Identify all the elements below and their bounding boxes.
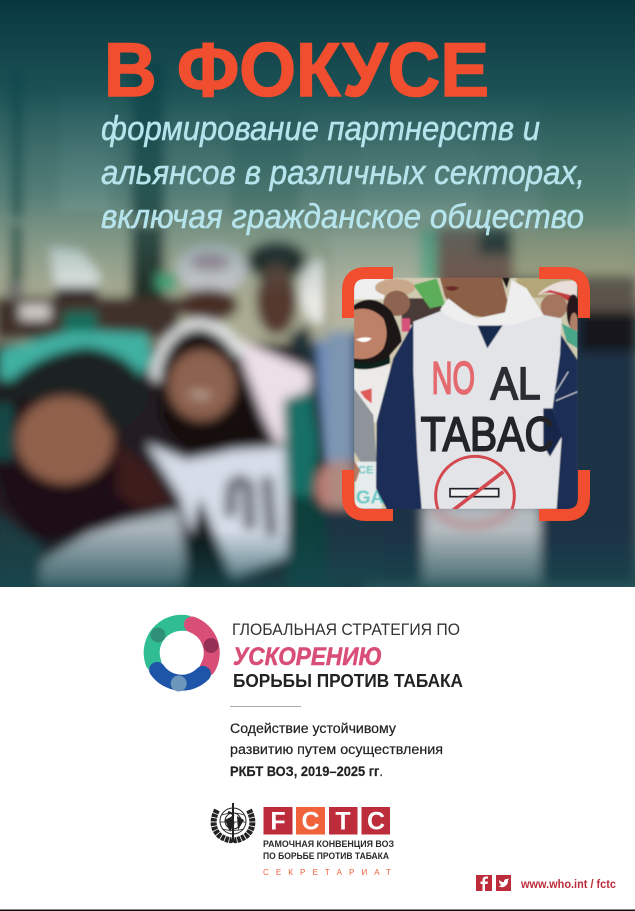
FCTC logo [263,807,394,877]
woman 1 cap [6,341,146,399]
icon: facebook [476,875,492,891]
strategy description: Содействие устойчивому [230,721,396,736]
strategy name: ГЛОБАЛЬНАЯ СТРАТЕГИЯ ПО [232,620,460,639]
green jacket [283,390,318,503]
woman 1 hair [0,401,136,544]
vest [413,310,562,509]
FCTC logo: C [301,808,320,836]
vest lettering: NO [432,352,475,403]
strategy description: развитию путем осуществления [230,742,443,757]
woman 2 hood [150,318,247,387]
navy sleeves [376,323,427,509]
strategy name: УСКОРЕНИЮ [233,643,382,671]
strategy name: БОРЬБЫ ПРОТИВ ТАБАКА [233,671,463,691]
subtitle: альянсов в различных секторах, [101,154,585,192]
subtitle: формирование партнерств и [101,110,540,148]
strategy ring logo [150,623,218,692]
upper blurred scenery [0,96,635,301]
right side blurred boy, in zoomed coordinates [327,228,635,585]
FCTC logo: C [367,808,385,836]
orange focus brackets [348,273,584,515]
icon: twitter [496,875,511,891]
focused photo: protester wearing NO AL TABACO vest: AL [491,358,541,409]
woman 2 shirt [147,443,287,587]
no smoking sign [434,454,516,509]
strategy name [232,620,463,691]
hood [440,280,543,326]
icon: WHO emblem [214,803,252,842]
website: www.who.int / fctc [520,877,616,891]
man on right [537,281,577,300]
woman on left [354,300,402,370]
head and neck [440,278,508,318]
focused photo: protester wearing NO AL TABACO vest: GAS [356,486,396,507]
focused photo: protester wearing NO AL TABACO vest: CE [358,464,374,476]
woman 2 hair [160,328,267,456]
strategy description [230,721,443,779]
FCTC logo: СЕКРЕТАРИАТ [263,868,391,877]
FCTC logo: ПО БОРЬБЕ ПРОТИВ ТАБАКА [263,851,389,861]
focused photo: protester wearing NO AL TABACO vest: TABAC [421,408,554,462]
FCTC logo: РАМОЧНАЯ КОНВЕНЦИЯ ВОЗ [263,839,394,849]
subtitle [101,110,585,236]
FCTC logo: T [335,808,351,836]
woman 1 shirt [33,510,187,587]
subtitle: включая гражданское общество [101,198,584,236]
title: В ФОКУСЕ [104,28,489,113]
focused photo: protester wearing NO AL TABACO vest [354,278,578,509]
left side crowd, in zoomed coordinates [0,217,363,597]
strategy description: РКБТ ВОЗ, 2019–2025 гг. [230,764,383,779]
FCTC logo: F [270,808,286,836]
blurred crowd photo background [0,0,635,597]
